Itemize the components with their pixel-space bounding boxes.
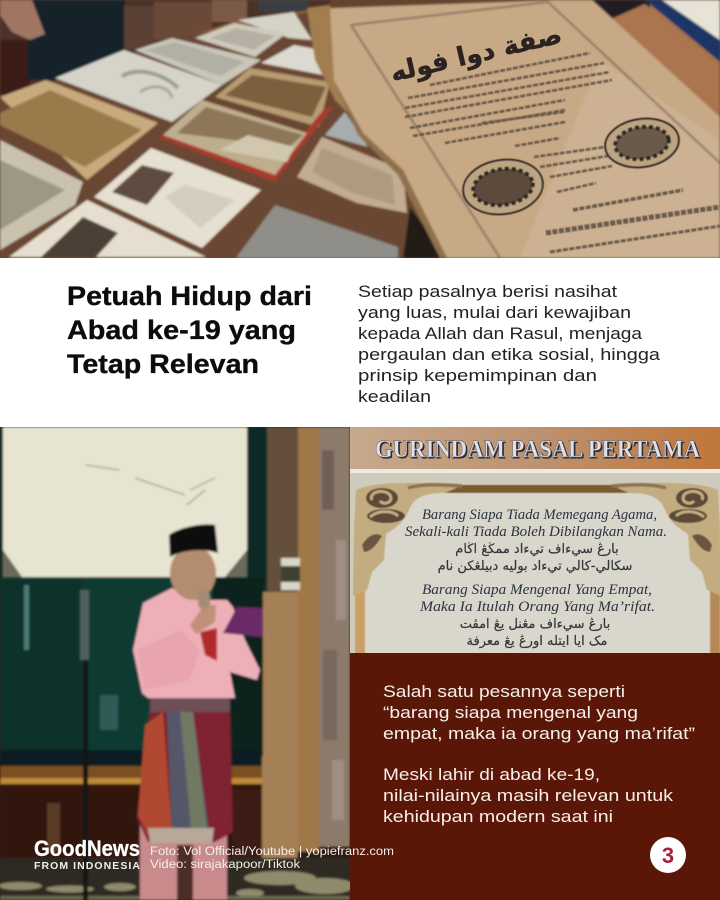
heading <box>67 281 312 379</box>
poster verse text: Sekali-kali Tiada Boleh Dibilangkan Nama. <box>405 524 667 540</box>
poster jawi text: سکالي-کالي تيءاد بوليه دبيلڠکن نام <box>438 559 632 574</box>
intro text block: keadilan <box>358 387 431 406</box>
photo credits <box>150 846 394 871</box>
poster verse text: Maka Ia Itulah Orang Yang Ma’rifat. <box>419 599 655 615</box>
boy: hand, mic and booklet <box>190 605 216 634</box>
intro text block: prinsip kepemimpinan dan <box>358 366 597 385</box>
boy: trousers <box>140 825 227 900</box>
poster frame <box>353 483 720 660</box>
intro text block: Setiap pasalnya berisi nasihat <box>358 282 617 301</box>
intro text block <box>358 282 661 406</box>
heading: Tetap Relevan <box>67 349 259 379</box>
photo credits: Foto: Vol Official/Youtube | yopiefranz.com <box>150 846 394 858</box>
panel text block: empat, maka ia orang yang ma’rifat” <box>383 724 695 743</box>
panel text block: kehidupan modern saat ini <box>383 807 613 826</box>
microphone stand <box>83 590 88 900</box>
seals <box>460 114 682 219</box>
right-side binder and orange table <box>648 3 720 66</box>
aged yellow spread <box>0 80 158 180</box>
boy: sarong <box>137 712 233 842</box>
poster verse text <box>405 507 667 615</box>
page number badge: 3 <box>662 843 674 868</box>
heading: Abad ke-19 yang <box>67 315 296 345</box>
poster verse text: Barang Siapa Tiada Memegang Agama, <box>422 507 657 523</box>
intro text block: yang luas, mulai dari kewajiban <box>358 303 631 322</box>
maroon text panel <box>350 653 720 900</box>
page inner frame <box>351 2 720 258</box>
carpet patches <box>0 871 355 900</box>
logo: GoodNews from Indonesia: FROM INDONESIA <box>34 860 140 872</box>
poster jawi text <box>438 542 632 649</box>
poster jawi text: مک ايا ايتله اورڠ يڠ معرفة <box>467 634 607 649</box>
poster verse text: Barang Siapa Mengenal Yang Empat, <box>422 582 652 598</box>
top photo: old manuscripts on a table <box>0 0 720 258</box>
poster jawi text: بارڠ سيءاف مڠنل يڠ امڤت <box>460 617 610 632</box>
page number badge <box>650 837 686 873</box>
intro text block: kepada Allah dan Rasul, menjaga <box>358 324 643 343</box>
panel text block: Salah satu pesannya seperti <box>383 682 625 701</box>
logo: GoodNews from Indonesia <box>34 836 140 872</box>
panel text block: nilai-nilainya masih relevan untuk <box>383 786 674 805</box>
panel text block: “barang siapa mengenal yang <box>383 703 638 722</box>
big title page <box>330 0 720 258</box>
arabic title: صفة دوا فوله <box>388 20 565 89</box>
corner ornaments <box>353 483 463 596</box>
poster title <box>376 440 702 459</box>
grey page spread with doodle <box>135 38 261 85</box>
poster jawi text: بارڠ سيءاف تيءاد ممڬڠ اڬام <box>455 542 619 557</box>
background furniture <box>0 0 330 85</box>
heading: Petuah Hidup dari <box>67 281 312 311</box>
boy: shirt <box>133 588 260 698</box>
boy: head and cap <box>170 546 216 600</box>
top table pages <box>238 12 312 40</box>
lower spread with red edge <box>158 107 333 182</box>
photo book spreads <box>94 148 261 248</box>
table <box>0 12 447 258</box>
photo credits: Video: sirajakapoor/Tiktok <box>150 859 300 871</box>
lower table documents <box>325 112 368 147</box>
room background <box>0 427 246 579</box>
brown manuscript spread <box>215 68 330 127</box>
panel text block <box>383 682 695 826</box>
intro text block: pergaulan dan etika sosial, hingga <box>358 345 661 364</box>
right photo: gurindam pasal pertama poster <box>350 427 720 660</box>
panel text block: Meski lahir di abad ke-19, <box>383 765 600 784</box>
left photo: boy reciting gurindam <box>0 427 355 900</box>
arabic small lines <box>405 53 720 252</box>
logo: GoodNews from Indonesia: GoodNews <box>34 836 140 861</box>
big page shadow and back sheet <box>402 208 440 258</box>
